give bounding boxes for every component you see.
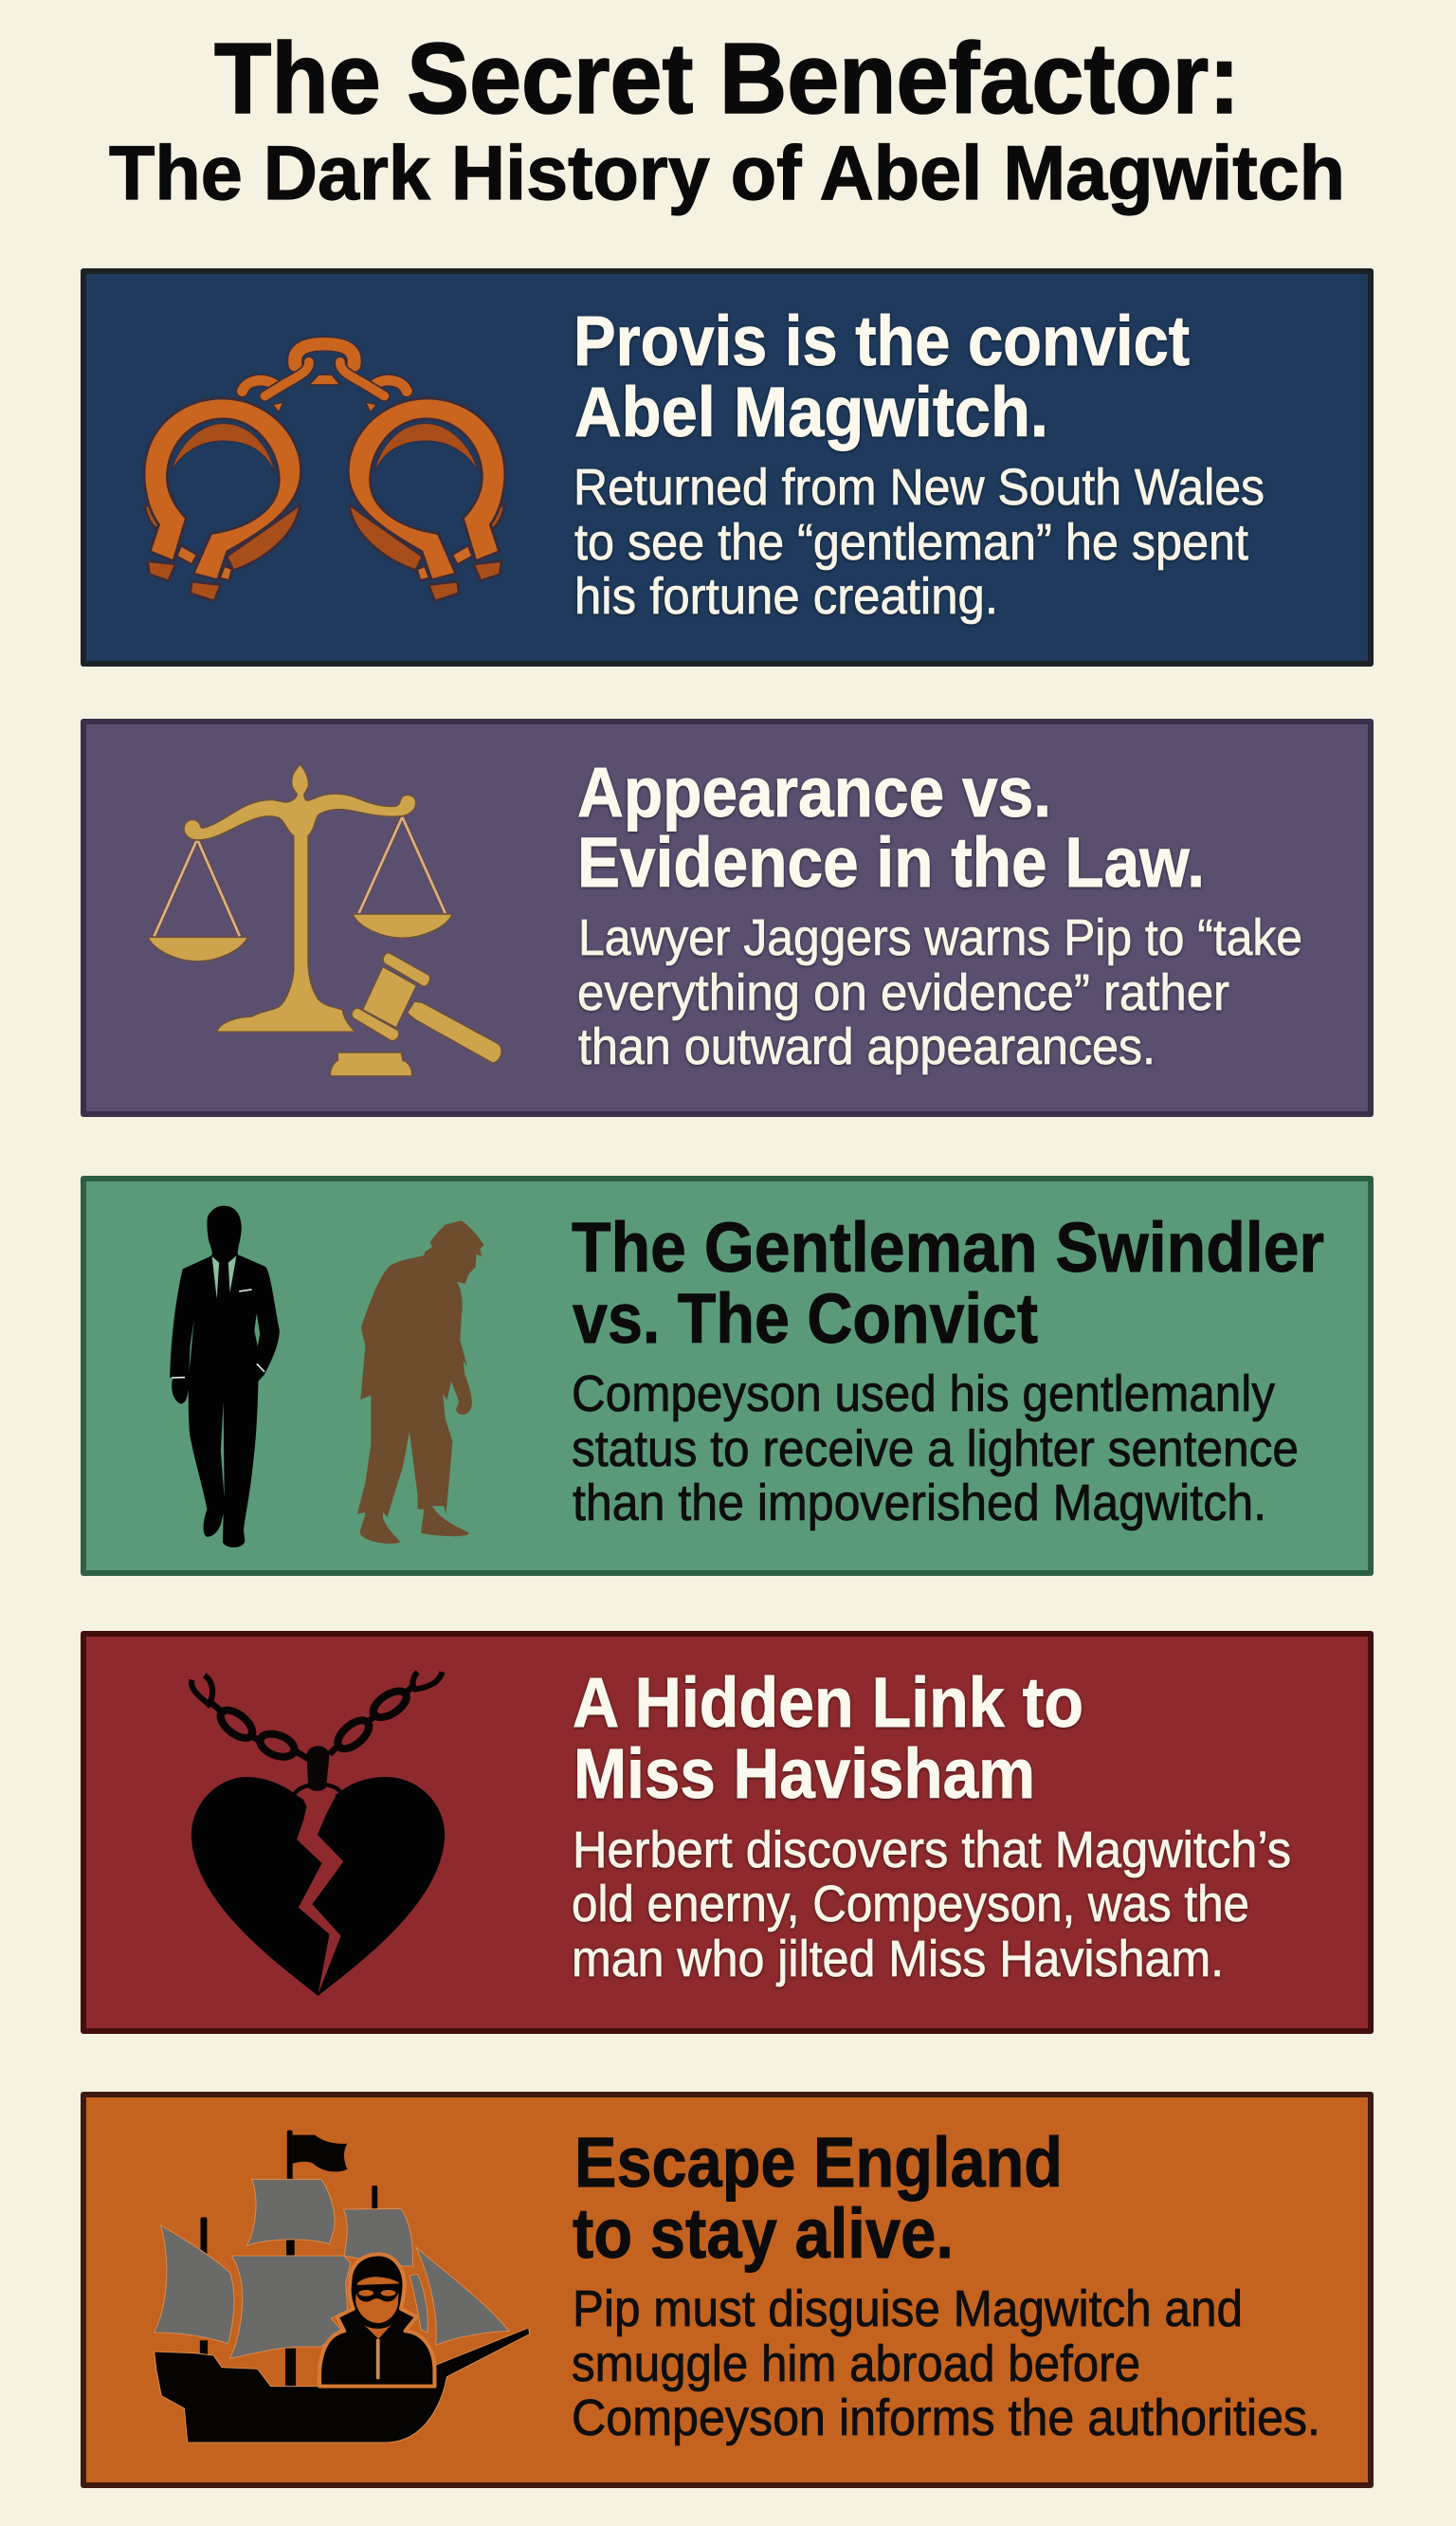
icon: rusty broken shackles: [144, 344, 505, 601]
panel: The Gentleman Swindler vs. The Convict: [81, 1176, 1374, 1576]
title: The Dark History of Abel Magwitch: [109, 131, 1345, 216]
heading: [573, 1663, 1083, 1813]
body text: than the impoverished Magwitch.: [573, 1474, 1266, 1531]
body text: [572, 2280, 1320, 2446]
heading: [572, 1208, 1324, 1358]
panel: Escape England to stay alive: [81, 2092, 1374, 2488]
heading: Evidence in the Law.: [577, 823, 1205, 902]
body text: everything on evidence” rather: [577, 964, 1229, 1021]
body text: Lawyer Jaggers warns Pip to “take: [578, 909, 1302, 966]
body text: Returned from New South Wales: [573, 459, 1265, 516]
heading: vs. The Convict: [573, 1279, 1038, 1358]
icon: ship with masked figure: [155, 2131, 530, 2443]
panel: A Hidden Link to Miss Havisham: [81, 1631, 1374, 2034]
icon: broken heart on chain: [191, 1672, 445, 1996]
body text: Herbert discovers that Magwitch’s: [573, 1821, 1291, 1878]
body text: Pip must disguise Magwitch and: [573, 2280, 1243, 2337]
icon: gentleman in suit: [170, 1206, 280, 1547]
body text: than outward appearances.: [578, 1018, 1156, 1075]
heading: Miss Havisham: [573, 1734, 1035, 1813]
title: The Secret Benefactor:: [214, 23, 1240, 135]
body text: status to receive a lighter sentence: [572, 1420, 1299, 1477]
body text: [577, 909, 1302, 1075]
title: [109, 23, 1345, 216]
icon: masked man: [319, 2254, 434, 2387]
body text: Compeyson informs the authorities.: [572, 2389, 1320, 2446]
body text: [572, 1821, 1291, 1987]
body text: smuggle him abroad before: [572, 2335, 1140, 2392]
body text: man who jilted Miss Havisham.: [572, 1931, 1224, 1987]
heading: [573, 302, 1190, 451]
heading: to stay alive.: [573, 2194, 954, 2273]
body text: [573, 459, 1265, 625]
heading: [573, 2123, 1063, 2273]
body text: [572, 1365, 1299, 1531]
body text: to see the “gentleman” he spent: [574, 514, 1248, 571]
body text: old enerny, Compeyson, was the: [572, 1876, 1249, 1932]
body text: Compeyson used his gentlemanly: [572, 1365, 1275, 1422]
panel: Provis is the convict: [81, 268, 1374, 667]
heading: Provis is the convict: [573, 302, 1190, 380]
heading: The Gentleman Swindler: [572, 1208, 1324, 1287]
body text: his fortune creating.: [574, 568, 998, 625]
heading: [577, 753, 1205, 902]
icon: gentleman and convict silhouettes: [170, 1206, 483, 1547]
panel: Appearance vs. Evidence in the Law: [81, 719, 1374, 1117]
heading: Appearance vs.: [577, 753, 1051, 832]
heading: Escape England: [574, 2123, 1063, 2202]
icon: ragged convict: [357, 1220, 483, 1544]
icon: scales of justice and gavel: [148, 764, 501, 1076]
heading: A Hidden Link to: [573, 1663, 1083, 1742]
heading: Abel Magwitch.: [574, 373, 1048, 451]
